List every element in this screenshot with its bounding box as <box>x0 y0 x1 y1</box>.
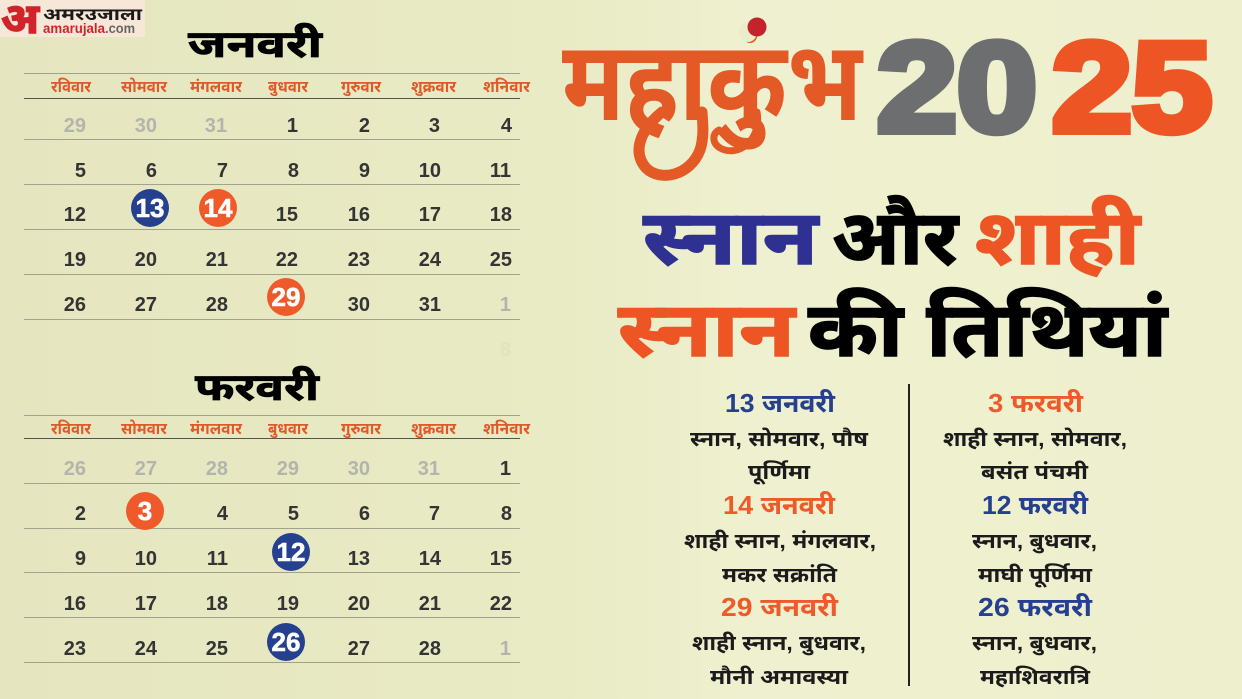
highlighted date: 14 January: 14 <box>204 193 233 223</box>
date grid: 17 <box>419 204 441 226</box>
heading: bath and royal bath dates: की तिथियां <box>808 287 1169 373</box>
list: January dates: शाही स्नान, बुधवार, <box>692 631 866 656</box>
highlighted date: 29 January <box>267 278 305 316</box>
heading: bath and royal bath dates: शाही <box>975 196 1142 281</box>
panel: February calendar <box>24 365 531 662</box>
weekday headers: रविवार <box>51 420 92 438</box>
date grid: 16 <box>348 204 370 226</box>
date grid: 1 <box>287 115 298 137</box>
date grid: 7 <box>217 160 228 182</box>
list: February dates: 3 फरवरी <box>988 388 1084 418</box>
date grid: 28 <box>419 638 441 660</box>
date grid: 27 <box>348 638 370 660</box>
date grid: 20 <box>348 593 370 615</box>
date grid: 11 <box>207 548 228 570</box>
heading: bath and royal bath dates <box>618 196 1169 373</box>
panel: January calendar <box>24 22 531 361</box>
date grid: 3 <box>429 115 440 137</box>
date grid: 31 <box>418 458 440 480</box>
divider <box>908 384 910 686</box>
list: February dates: 26 फरवरी <box>978 592 1093 622</box>
date grid: 10 <box>135 548 157 570</box>
weekday headers: मंगलवार <box>190 420 243 438</box>
date grid: 27 <box>135 458 157 480</box>
title: 2025: 25 <box>1052 16 1212 158</box>
date grid: 22 <box>276 249 298 271</box>
date grid: 23 <box>348 249 370 271</box>
date grid: 23 <box>64 638 86 660</box>
date grid: 29 <box>64 115 86 137</box>
date grid: 4 <box>217 503 229 525</box>
date grid: 31 <box>419 294 441 316</box>
weekday headers: सोमवार <box>121 78 168 96</box>
highlighted date: 14 January <box>199 189 237 227</box>
weekday headers: बुधवार <box>268 421 309 439</box>
date grid: 5 <box>75 160 86 182</box>
heading: bath and royal bath dates: स्नान <box>618 288 797 373</box>
logo: Amar Ujala <box>0 0 145 42</box>
date grid: 9 <box>75 548 86 570</box>
list: February dates: स्नान, बुधवार, <box>972 632 1097 656</box>
heading: February: फरवरी <box>195 365 320 409</box>
date grid: 28 <box>206 294 228 316</box>
date grid: 8 <box>501 503 512 525</box>
weekday headers: शनिवार <box>483 78 531 96</box>
logo: Amar Ujala: .com <box>105 20 135 36</box>
date grid: 27 <box>135 294 157 316</box>
weekday headers: सोमवार <box>121 420 168 438</box>
date grid: 15 <box>490 548 512 570</box>
title: Mahakumbh: महाकुंभ <box>562 19 864 151</box>
logo: Amar Ujala: amarujala <box>43 20 105 36</box>
date grid: 19 <box>277 593 299 615</box>
list: January dates <box>684 388 876 689</box>
date grid: 1 <box>500 294 511 316</box>
date grid: 17 <box>135 593 157 615</box>
date grid: 28 <box>206 458 228 480</box>
heading: bath and royal bath dates: स्नान <box>643 196 819 281</box>
date grid: 18 <box>206 593 228 615</box>
heading: January: जनवरी <box>188 22 323 66</box>
date grid: 11 <box>490 160 511 182</box>
date grid: 30 <box>348 458 370 480</box>
weekday headers <box>51 420 531 439</box>
highlighted date: 12 February <box>272 533 310 571</box>
highlighted date: 12 February: 12 <box>277 537 305 567</box>
list: January dates: 14 जनवरी <box>723 490 836 520</box>
date grid: 2 <box>75 503 86 525</box>
date grid: 1 <box>500 458 511 480</box>
date grid: 16 <box>64 593 86 615</box>
date grid: 21 <box>419 593 441 615</box>
date grid: 10 <box>419 160 441 182</box>
date grid: 1 <box>500 638 511 660</box>
date grid: 25 <box>490 249 512 271</box>
date grid: 21 <box>206 249 228 271</box>
list: January dates: 13 जनवरी <box>725 388 836 418</box>
date grid: 6 <box>146 160 157 182</box>
heading: bath and royal bath dates: और <box>832 196 960 281</box>
highlighted date: 13 January <box>131 189 169 227</box>
date grid: 24 <box>135 638 158 660</box>
date grid: 24 <box>419 249 442 271</box>
highlighted date: 29 January: 29 <box>272 282 300 312</box>
list: February dates: शाही स्नान, सोमवार, <box>943 427 1127 451</box>
date grid: 20 <box>135 249 157 271</box>
weekday headers: गुरुवार <box>341 421 382 439</box>
date grid: 22 <box>490 593 512 615</box>
weekday headers: शुक्रवार <box>411 79 457 97</box>
date grid: 7 <box>429 503 440 525</box>
date grid: 4 <box>501 115 513 137</box>
date grid: 19 <box>64 249 86 271</box>
date grid: 14 <box>419 548 442 570</box>
list: January dates: 29 जनवरी <box>721 592 839 622</box>
date grid: 8 <box>500 339 511 361</box>
list: February dates: बसंत पंचमी <box>981 460 1089 484</box>
date grid: 30 <box>135 115 157 137</box>
title: 2025 <box>877 16 1212 158</box>
date grid: 6 <box>359 503 370 525</box>
list: February dates: माघी पूर्णिमा <box>978 563 1093 588</box>
highlighted date: 13 January: 13 <box>136 193 164 223</box>
date grid: 30 <box>348 294 370 316</box>
date grid: 8 <box>288 160 299 182</box>
date grid: 26 <box>64 294 86 316</box>
logo: Amar Ujala: अमरउजाला <box>43 5 143 24</box>
highlighted date: 26 February <box>267 623 305 661</box>
list: January dates: मकर सक्रांति <box>722 563 838 587</box>
weekday headers: शनिवार <box>483 420 531 438</box>
list: January dates: शाही स्नान, मंगलवार, <box>684 529 876 553</box>
date grid: 13 <box>348 548 370 570</box>
list: January dates: पूर्णिमा <box>748 460 811 485</box>
list: February dates: स्नान, बुधवार, <box>972 530 1097 554</box>
weekday headers: रविवार <box>51 78 92 96</box>
date grid: 31 <box>205 115 227 137</box>
list: February dates: महाशिवरात्रि <box>980 665 1090 689</box>
weekday headers: मंगलवार <box>190 78 243 96</box>
date grid: 15 <box>276 204 298 226</box>
date grid: 26 <box>64 458 86 480</box>
date grid: 29 <box>277 458 299 480</box>
date grid: 25 <box>206 638 228 660</box>
highlighted date: 3 February <box>126 492 164 530</box>
list: January dates: स्नान, सोमवार, पौष <box>690 427 869 451</box>
date grid: 12 <box>64 204 86 226</box>
list: February dates: 12 फरवरी <box>982 490 1089 520</box>
weekday headers <box>51 78 531 97</box>
highlighted date: 3 February: 3 <box>138 496 152 526</box>
highlighted date: 26 February: 26 <box>272 627 300 657</box>
date grid: 5 <box>288 503 299 525</box>
title: 2025: 20 <box>877 16 1037 158</box>
weekday headers: शुक्रवार <box>411 421 457 439</box>
weekday headers: गुरुवार <box>341 79 382 97</box>
date grid: 2 <box>359 115 370 137</box>
date grid <box>64 115 513 361</box>
weekday headers: बुधवार <box>268 79 309 97</box>
date grid: 9 <box>359 160 370 182</box>
list: January dates: मौनी अमावस्या <box>710 665 849 689</box>
date grid <box>64 458 512 660</box>
list: February dates <box>943 388 1127 689</box>
date grid: 18 <box>490 204 512 226</box>
